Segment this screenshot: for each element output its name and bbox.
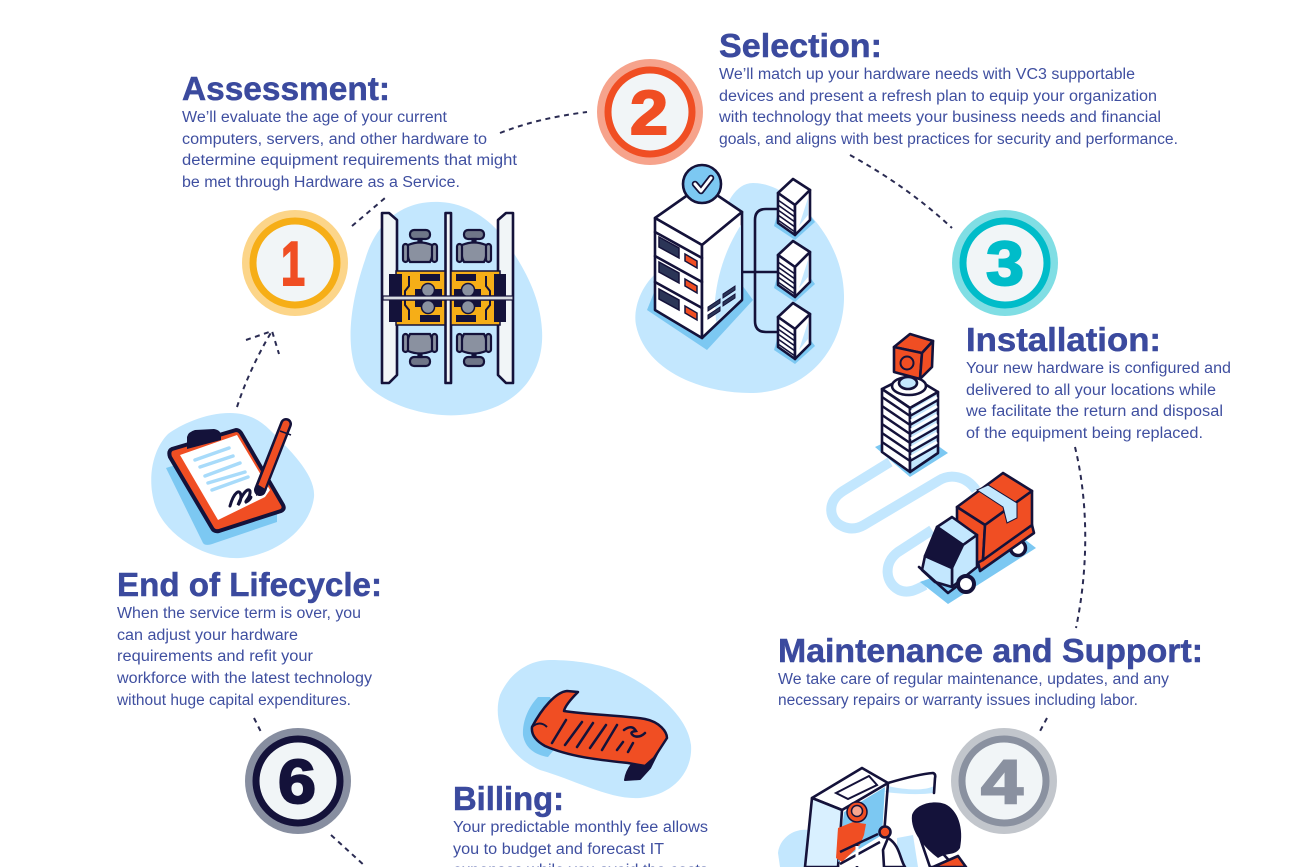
number badge 4: 4 xyxy=(981,748,1024,817)
text block: Assessment: determine equipment requirements that might xyxy=(182,152,518,169)
dashed connector: installation to maintenance xyxy=(1075,447,1085,628)
text block: End of Lifecycle xyxy=(116,605,372,709)
text block: Assessment xyxy=(182,109,518,191)
building xyxy=(875,334,948,477)
text block: Billing: Your predictable monthly fee allows xyxy=(453,819,708,836)
small server 1 xyxy=(774,179,815,240)
icon: check badge xyxy=(683,165,721,203)
dashed connector: step 1 to assessment xyxy=(352,198,385,226)
small server 3 xyxy=(774,303,815,364)
icon: delivery route xyxy=(831,334,1036,604)
text block: Assessment: computers, servers, and other hardware to xyxy=(182,131,487,148)
heading: Maintenance and Support: Maintenance and Support: xyxy=(778,632,1203,669)
truck xyxy=(919,473,1036,604)
number badge 3 xyxy=(952,210,1058,316)
text block: Billing xyxy=(453,819,708,867)
dashed connector: selection to step 3 xyxy=(850,155,952,228)
dashed arrow: end of lifecycle to step 1 xyxy=(237,331,279,407)
icon: technician repairing hardware xyxy=(778,768,966,867)
icon: office desks xyxy=(351,202,542,415)
text block: Installation xyxy=(965,360,1231,442)
text block: Maintenance and Support: necessary repairs or warranty issues including labor. xyxy=(778,692,1138,709)
technician hair xyxy=(912,802,961,858)
icon: servers xyxy=(635,165,844,393)
small server 2 xyxy=(774,241,815,302)
dashed connector: lifecycle text to step 6 xyxy=(254,718,261,732)
text block: Selection: devices and present a refresh plan to equip your organization xyxy=(719,88,1157,105)
icon: billing scroll xyxy=(498,660,691,798)
text block: Assessment: be met through Hardware as a Service. xyxy=(182,174,460,191)
dashed connector: step 6 to billing xyxy=(331,835,366,867)
text block: End of Lifecycle: workforce with the latest technology xyxy=(116,670,372,687)
text block: Billing: you to budget and forecast IT xyxy=(453,841,665,858)
text block: Installation: of the equipment being replaced. xyxy=(966,425,1203,442)
number badge 2 xyxy=(597,59,703,165)
text block: Installation: Your new hardware is configured and xyxy=(966,360,1231,377)
text block: Selection xyxy=(718,66,1178,148)
number badge 6 xyxy=(245,728,351,834)
number badge 3: 3 xyxy=(986,230,1024,299)
heading: End of Lifecycle: End of Lifecycle: xyxy=(117,566,382,603)
text block: Selection: We’ll match up your hardware needs with VC3 supportable xyxy=(719,66,1135,83)
text block: Selection: with technology that meets your business needs and financial xyxy=(718,109,1161,126)
heading: Selection: Selection: xyxy=(719,27,882,64)
chair top left xyxy=(403,230,437,262)
text block: Maintenance and Support: We take care of regular maintenance, updates, and any xyxy=(778,671,1169,688)
text block: Selection: goals, and aligns with best practices for security and performance. xyxy=(719,131,1178,148)
chair top right xyxy=(457,230,491,262)
heading: Assessment: Assessment: xyxy=(182,70,390,107)
number badge 1 xyxy=(242,210,348,316)
heading: Billing: Billing: xyxy=(453,780,564,817)
text block: Installation: delivered to all your locations while xyxy=(966,382,1216,399)
text block: End of Lifecycle: When the service term is over, you xyxy=(117,605,361,622)
text block: Assessment: We’ll evaluate the age of your current xyxy=(182,109,448,126)
text block: Maintenance and Support xyxy=(778,671,1169,709)
dashed connector: maintenance to step 4 xyxy=(1039,718,1047,733)
number badge 1: 1 xyxy=(281,230,305,299)
dashed connector: assessment to step 2 xyxy=(500,112,587,133)
heading: Installation: Installation: xyxy=(966,321,1161,358)
chair bottom left xyxy=(403,334,437,366)
number badge 6: 6 xyxy=(278,748,316,817)
text block: End of Lifecycle: without huge capital expenditures. xyxy=(116,692,351,709)
number badge 2: 2 xyxy=(630,79,668,148)
number badge 4 xyxy=(951,728,1057,834)
chair bottom right xyxy=(457,334,491,366)
icon: clipboard and pen xyxy=(151,413,314,558)
text block: End of Lifecycle: can adjust your hardware xyxy=(117,627,298,644)
text block: End of Lifecycle: requirements and refit your xyxy=(117,648,313,665)
text block: Installation: we facilitate the return and disposal xyxy=(965,403,1223,420)
